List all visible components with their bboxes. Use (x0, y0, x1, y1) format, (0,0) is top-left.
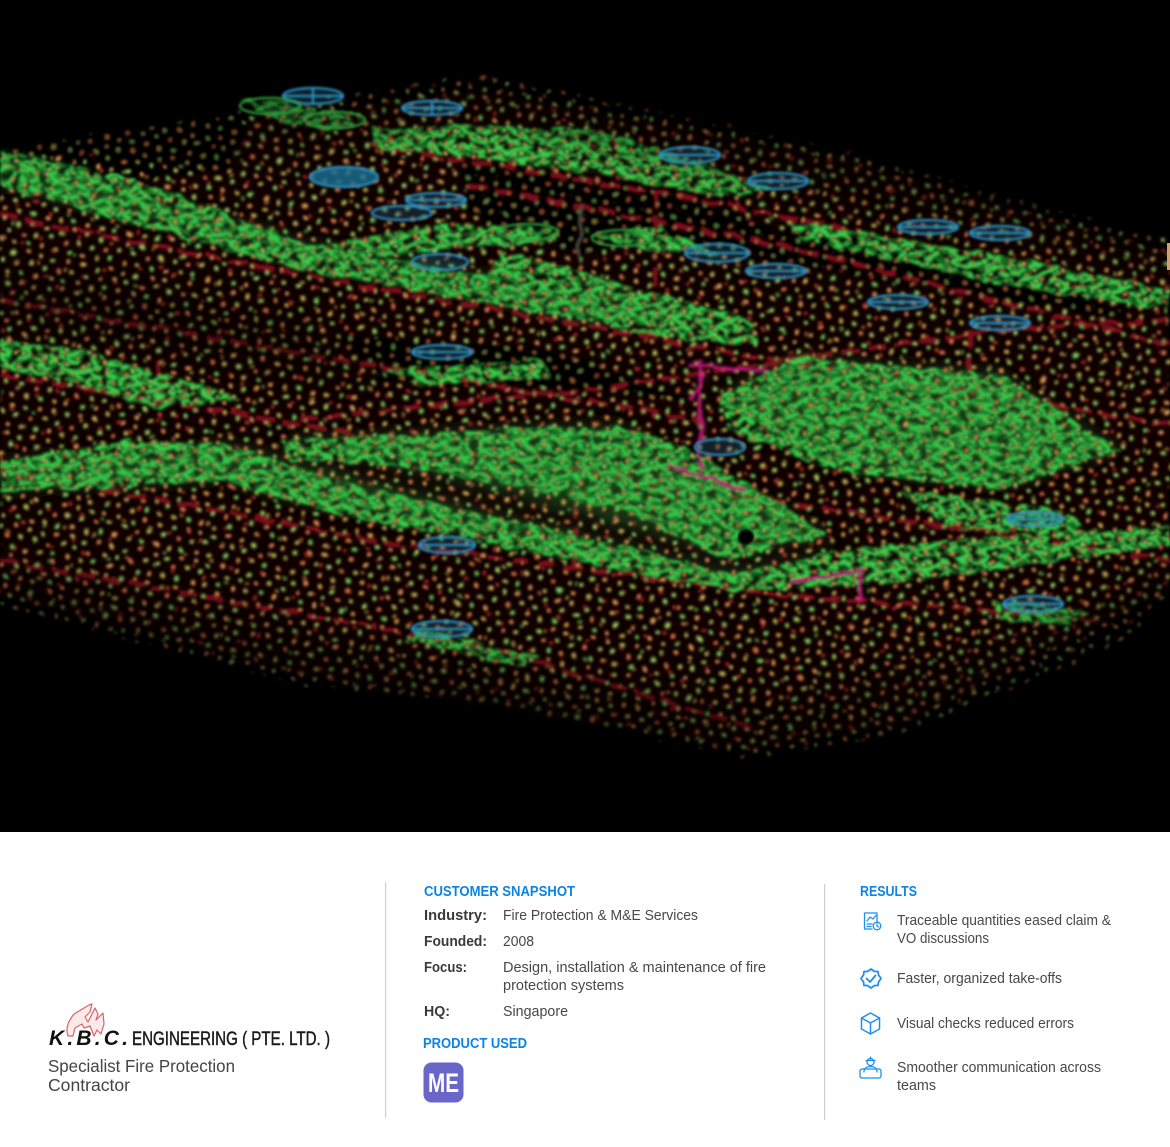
row: hq (424, 1004, 568, 1020)
dots over bands (0, 75, 1170, 760)
icon: chart report (864, 913, 881, 930)
text: VO discussions (897, 931, 989, 947)
logo wordmark: K . B . C . (49, 1027, 128, 1050)
company description: Contractor (48, 1075, 130, 1095)
text (897, 913, 1111, 947)
row: founded: Founded: (424, 934, 487, 950)
company description: Specialist Fire Protection (48, 1056, 235, 1076)
result: traceable quantities (864, 913, 1111, 947)
divider left (385, 882, 386, 1118)
cad model image (0, 0, 1170, 832)
row: focus: protection systems (503, 978, 624, 994)
logo wordmark: ENGINEERING ( PTE. LTD. ) (132, 1029, 330, 1050)
text: teams (897, 1078, 936, 1094)
snapshot heading: CUSTOMER SNAPSHOT (424, 884, 575, 900)
row: focus: Design, installation & maintenance of fire (503, 960, 766, 976)
panel: company (48, 1004, 330, 1095)
row: founded: 2008 (503, 934, 534, 950)
text (897, 1060, 1101, 1094)
icon: ME product (424, 1062, 464, 1102)
text: Traceable quantities eased claim & (897, 913, 1111, 929)
result: communication (860, 1057, 1101, 1094)
row: industry: Industry: (424, 908, 487, 924)
row: founded (424, 934, 534, 950)
row: focus (424, 960, 766, 994)
text: Visual checks reduced errors (897, 1016, 1074, 1032)
product used heading: PRODUCT USED (423, 1036, 527, 1052)
black voids between bands (0, 110, 1150, 400)
row: industry: Fire Protection & M&E Services (503, 908, 698, 924)
row: focus: Focus: (424, 960, 467, 976)
magenta risers (670, 360, 860, 602)
dark red haze (0, 90, 1170, 750)
row: industry (424, 908, 698, 924)
row: hq: Singapore (503, 1004, 568, 1020)
icon: box (862, 1013, 880, 1034)
green branch lines (0, 100, 1170, 668)
panel: customer snapshot (423, 884, 766, 1102)
result: visual checks (862, 1013, 1074, 1034)
panel: results (860, 884, 1111, 1094)
divider right (824, 884, 825, 1120)
edge fade (0, 65, 1170, 770)
logo wordmark (49, 1027, 330, 1050)
dark junction (738, 529, 754, 545)
company description (48, 1056, 235, 1095)
icon: ME product: ME (428, 1068, 459, 1098)
dotted sprinkler field (0, 75, 1170, 760)
right edge mark (1167, 243, 1170, 270)
icon: check badge (861, 969, 881, 988)
row: hq: HQ: (424, 1004, 450, 1020)
field dimming (0, 80, 1170, 770)
red pipe runs (0, 145, 1170, 730)
icon: worker with plan (860, 1057, 881, 1078)
result: faster take-offs (861, 969, 1062, 988)
logo flame (67, 1004, 104, 1036)
text: Faster, organized take-offs (897, 971, 1062, 987)
text: Smoother communication across (897, 1060, 1101, 1076)
grey riser (579, 205, 581, 265)
bottom panel background (0, 832, 1170, 1147)
green rings (240, 98, 652, 246)
results heading: RESULTS (860, 884, 917, 900)
green band glow (0, 150, 1120, 585)
sprinkler rings (283, 88, 1063, 637)
